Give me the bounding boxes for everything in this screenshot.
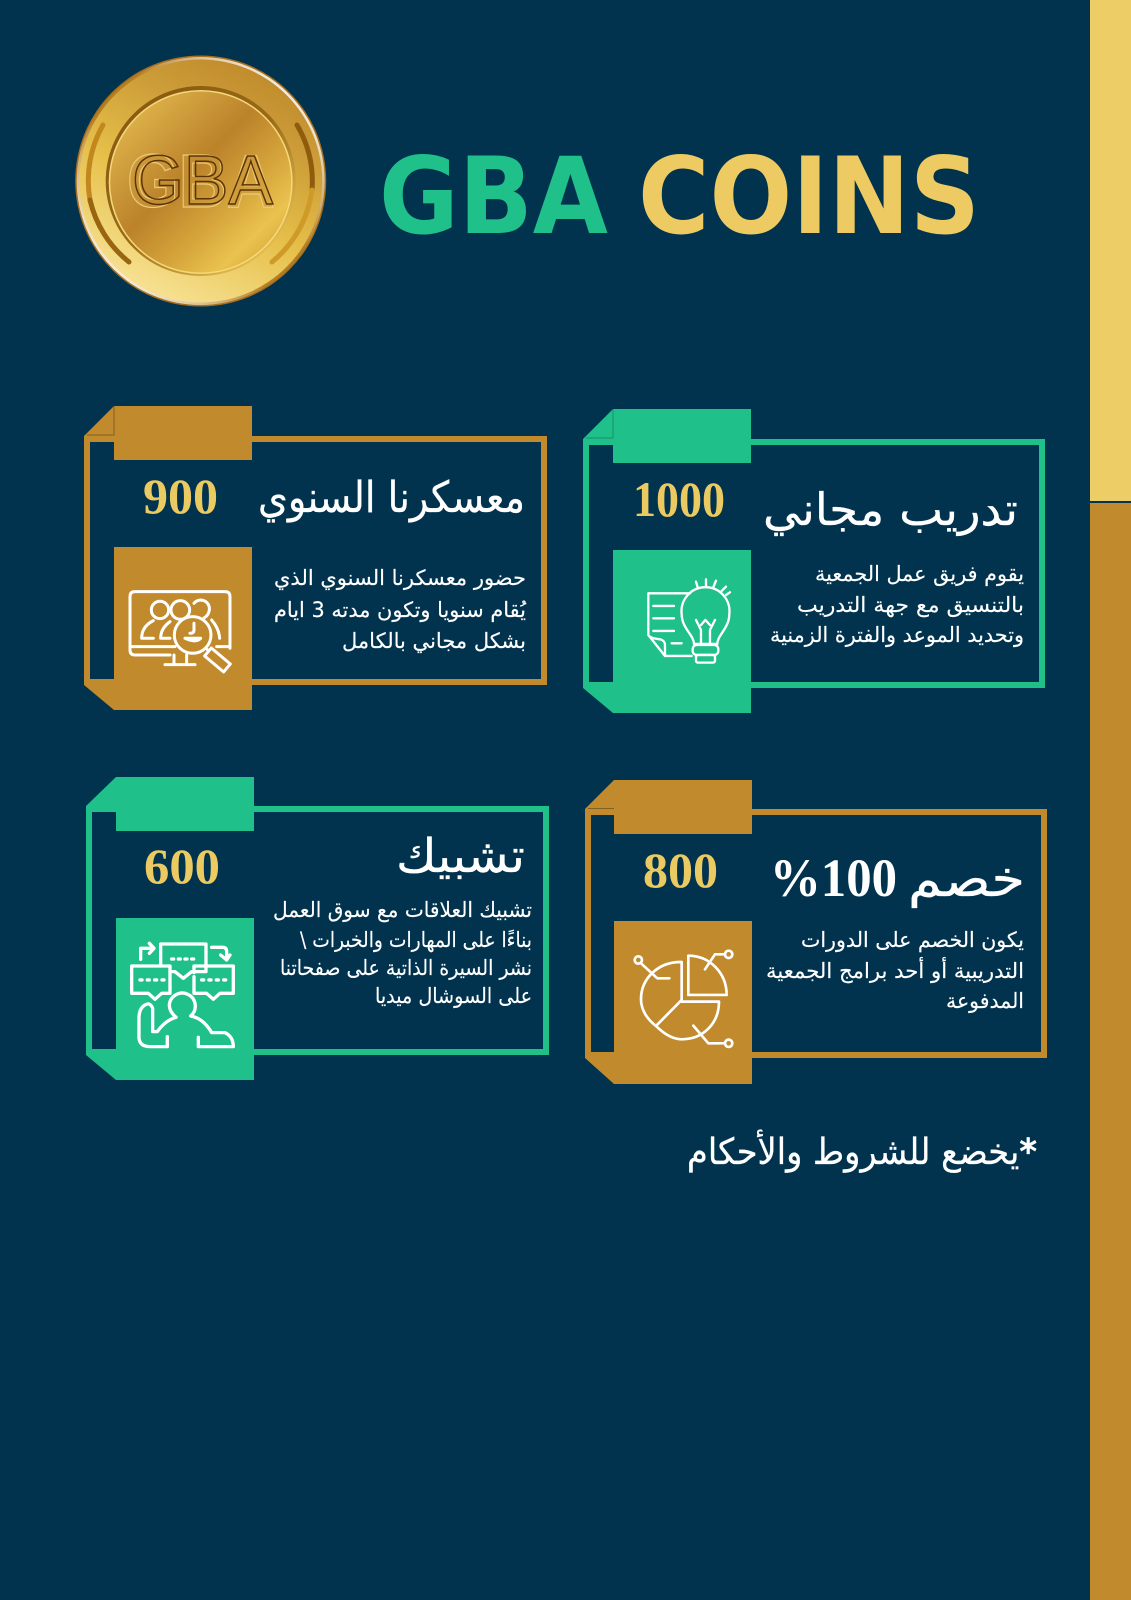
text block bbox=[274, 566, 527, 653]
heading: تشبيك bbox=[396, 829, 525, 884]
footnote: terms and conditions: *يخضع للشروط والأحكام bbox=[687, 1129, 1037, 1173]
text block: تشبيك العلاقات مع سوق العمل bbox=[273, 898, 532, 922]
text block bbox=[766, 928, 1024, 1013]
text block: يقوم فريق عمل الجمعية bbox=[815, 562, 1024, 586]
card frame bbox=[585, 780, 1047, 1084]
text block: يُقام سنويا وتكون مدته 3 ايام bbox=[274, 598, 527, 622]
sidebar: colour strip bbox=[1090, 0, 1131, 1600]
icon: gold GBA coin bbox=[75, 56, 326, 306]
panel: 100% discount bbox=[585, 780, 1047, 1084]
heading: %100 bbox=[770, 848, 897, 908]
icon: speech bubbles and person bbox=[132, 943, 233, 1047]
icon: gold GBA coin: GBA bbox=[127, 139, 275, 223]
text block: نشر السيرة الذاتية على صفحاتنا bbox=[280, 956, 532, 980]
icon: pie chart with nodes bbox=[635, 951, 732, 1047]
text block: بشكل مجاني بالكامل bbox=[342, 629, 526, 653]
text block: يكون الخصم على الدورات bbox=[801, 928, 1024, 953]
icon: gold GBA coin: GBA bbox=[132, 141, 273, 219]
text block bbox=[770, 562, 1024, 647]
panel: free training bbox=[583, 409, 1045, 713]
number: 800 bbox=[643, 842, 718, 898]
text block: على السوشال ميديا bbox=[375, 984, 532, 1008]
text block: وتحديد الموعد والفترة الزمنية bbox=[770, 623, 1024, 647]
heading: خصم bbox=[908, 850, 1025, 908]
text block: المدفوعة bbox=[946, 989, 1024, 1013]
text block: بالتنسيق مع جهة التدريب bbox=[797, 593, 1024, 617]
title: COINS bbox=[638, 135, 980, 258]
card frame bbox=[86, 777, 549, 1080]
number: 900 bbox=[143, 468, 218, 524]
icon: light bulb and note bbox=[648, 579, 730, 663]
title bbox=[379, 135, 980, 258]
number: 600 bbox=[144, 838, 220, 894]
card frame bbox=[583, 409, 1045, 713]
text block bbox=[273, 898, 532, 1008]
heading: تدريب مجاني bbox=[763, 483, 1018, 536]
title: GBA bbox=[379, 135, 608, 258]
card frame bbox=[84, 406, 547, 710]
text block: حضور معسكرنا السنوي الذي bbox=[274, 566, 526, 590]
icon: people on monitor with magnifier bbox=[130, 592, 230, 672]
text block: التدريبية أو أحد برامج الجمعية bbox=[766, 957, 1024, 983]
heading bbox=[770, 848, 1025, 908]
panel: annual camp bbox=[84, 406, 547, 710]
number: 1000 bbox=[633, 471, 725, 527]
text block: بناءًا على المهارات والخبرات \ bbox=[300, 928, 532, 952]
panel: networking bbox=[86, 777, 549, 1080]
heading: معسكرنا السنوي bbox=[258, 473, 525, 523]
